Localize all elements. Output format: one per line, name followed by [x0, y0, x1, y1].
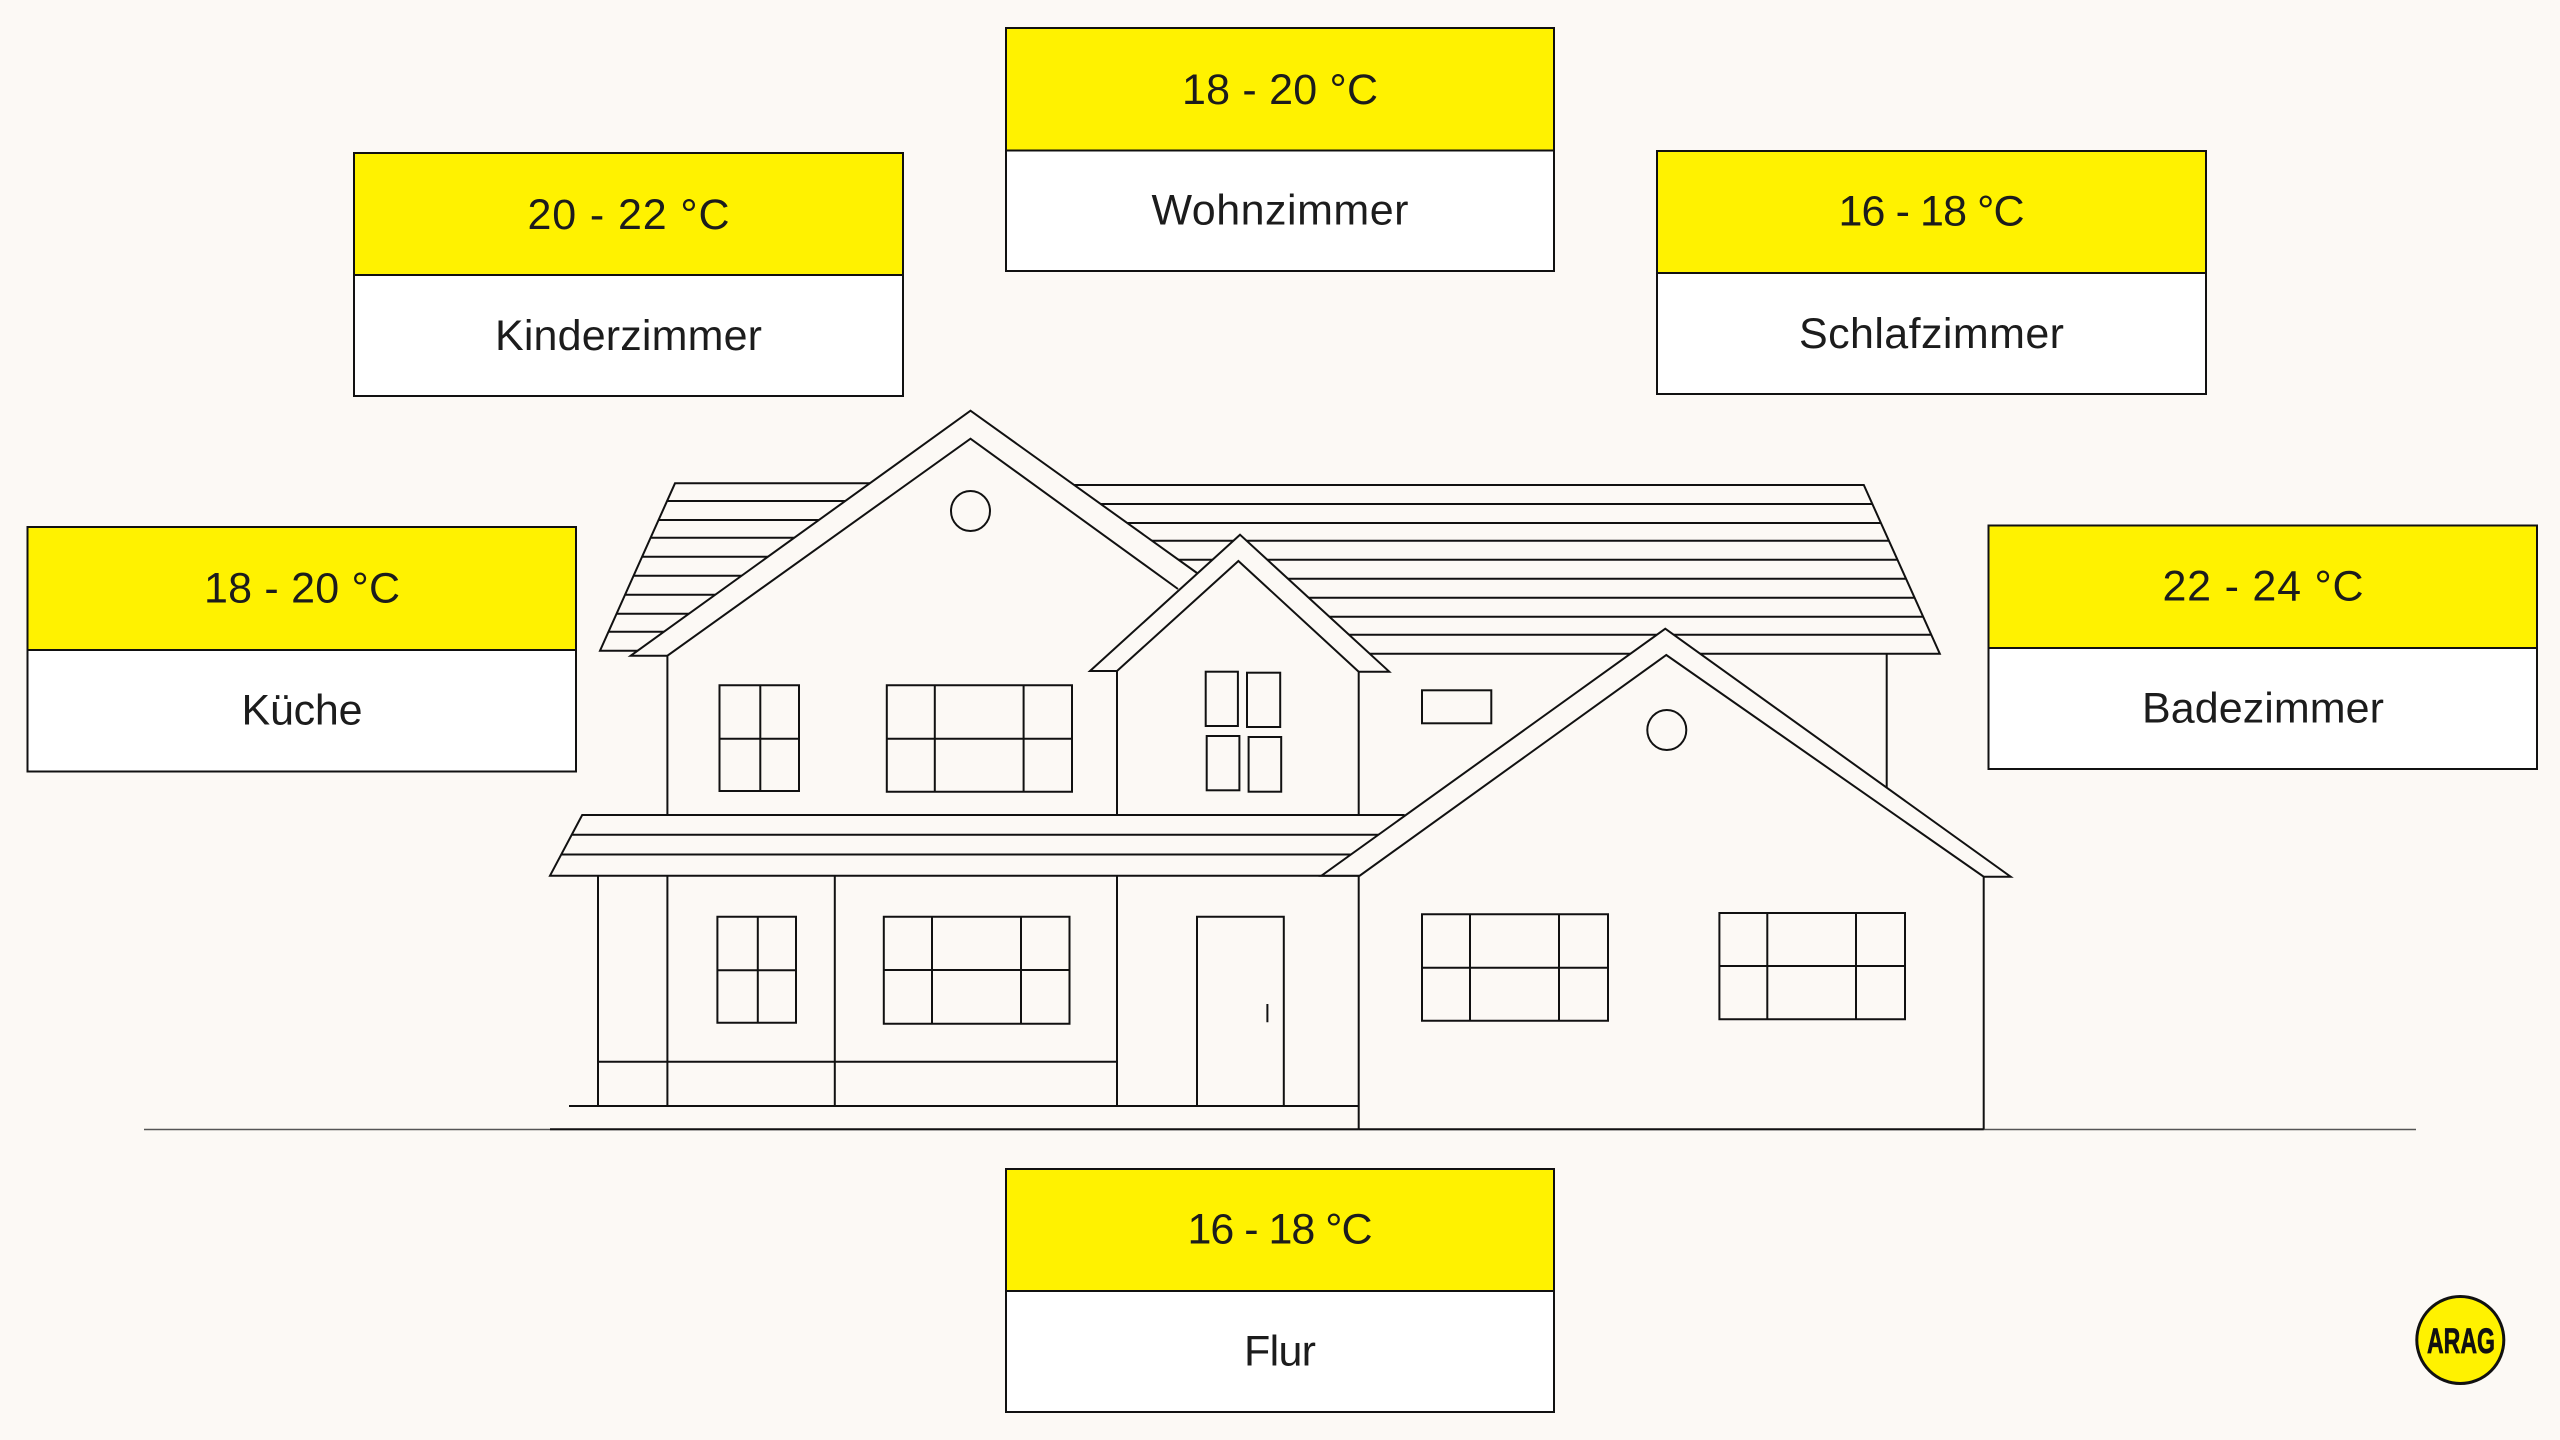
panel: Wohnzimmer: [1006, 28, 1554, 271]
logo: ARAG: [2417, 1296, 2504, 1384]
small dormer gable: [1090, 535, 1389, 815]
ground floor wide window: [884, 917, 1070, 1024]
panel: Flur: [1006, 1169, 1554, 1412]
gable round window: [951, 491, 990, 531]
front gable house: [1321, 629, 2011, 1129]
panel: Küche: Küche: [242, 686, 362, 734]
upper wide window: [887, 685, 1072, 792]
front right window: [1719, 913, 1905, 1019]
upper left window: [720, 685, 799, 791]
panel: Wohnzimmer: Wohnzimmer: [1152, 186, 1408, 234]
panel: Flur: Flur: [1244, 1328, 1316, 1376]
porch roof: [550, 815, 1405, 876]
house illustration: [550, 411, 2011, 1129]
front gable round window: [1647, 710, 1686, 750]
panel: Flur: 16 - 18 °C: [1188, 1206, 1372, 1254]
logo: ARAG: ARAG: [2427, 1322, 2495, 1361]
panel: Schlafzimmer: [1657, 151, 2206, 394]
front door with handle: [1197, 917, 1284, 1106]
panel: Kinderzimmer: Kinderzimmer: [495, 312, 762, 360]
panel: Wohnzimmer: 18 - 20 °C: [1182, 66, 1378, 114]
ground floor left window: [717, 917, 796, 1023]
panel: Schlafzimmer: Schlafzimmer: [1799, 310, 2064, 358]
panel: Badezimmer: Badezimmer: [2142, 684, 2384, 732]
panel: Badezimmer: [1988, 526, 2537, 769]
panel: Kinderzimmer: [354, 153, 903, 396]
panel: Küche: [28, 527, 576, 772]
rear wall with small window: [1359, 654, 1887, 875]
dormer windows: [1206, 672, 1281, 792]
ground line: [144, 1128, 2416, 1130]
panel: Badezimmer: 22 - 24 °C: [2162, 562, 2364, 610]
front left window: [1422, 914, 1608, 1021]
main gable: [631, 411, 1240, 815]
panel: Küche: 18 - 20 °C: [204, 564, 400, 612]
panel: Schlafzimmer: 16 - 18 °C: [1838, 188, 2024, 236]
panel: Kinderzimmer: 20 - 22 °C: [528, 191, 730, 239]
back roof with shingle lines: [600, 483, 1940, 654]
ground floor porch with columns and railing: [550, 876, 1359, 1129]
